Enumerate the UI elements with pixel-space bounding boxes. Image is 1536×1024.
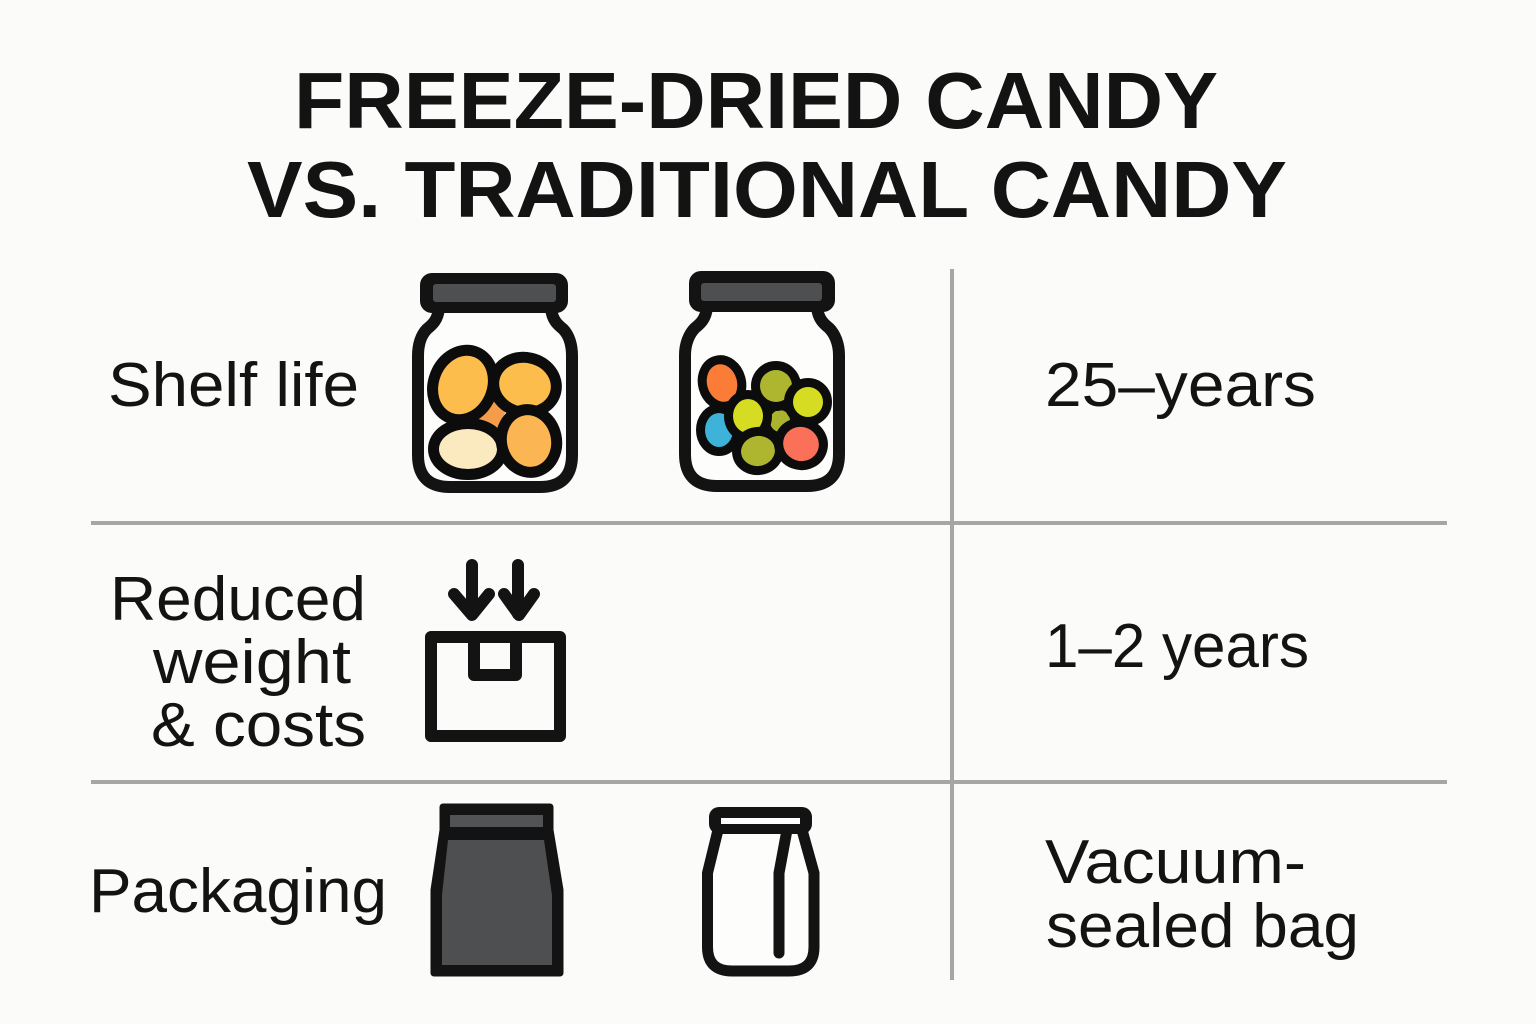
label: reduced weight and costs: weight: [152, 628, 351, 697]
label: reduced weight and costs: [110, 565, 366, 760]
label: shelf life: Shelf life: [108, 351, 359, 420]
icon: dark vacuum-sealed bag: [434, 807, 560, 973]
value: traditional shelf life: 25–years: [1045, 351, 1316, 420]
icon: box with down arrows: [431, 565, 560, 736]
value: packaging row: [1045, 828, 1359, 961]
label: reduced weight and costs: & costs: [151, 691, 366, 760]
value: packaging row: sealed bag: [1046, 892, 1359, 961]
icon: jar of freeze-dried candy: [418, 273, 572, 487]
label: reduced weight and costs: Reduced: [110, 565, 366, 634]
value: packaging row: Vacuum-: [1045, 828, 1306, 897]
value: weight row: 1–2 years: [1045, 612, 1309, 681]
title: FREEZE-DRIED CANDY: [294, 56, 1218, 145]
label: packaging: Packaging: [89, 857, 387, 926]
title: [247, 56, 1287, 234]
icon: clear bag: [708, 807, 814, 971]
icon: jar of traditional candy: [685, 271, 839, 486]
title: VS. TRADITIONAL CANDY: [247, 145, 1287, 234]
